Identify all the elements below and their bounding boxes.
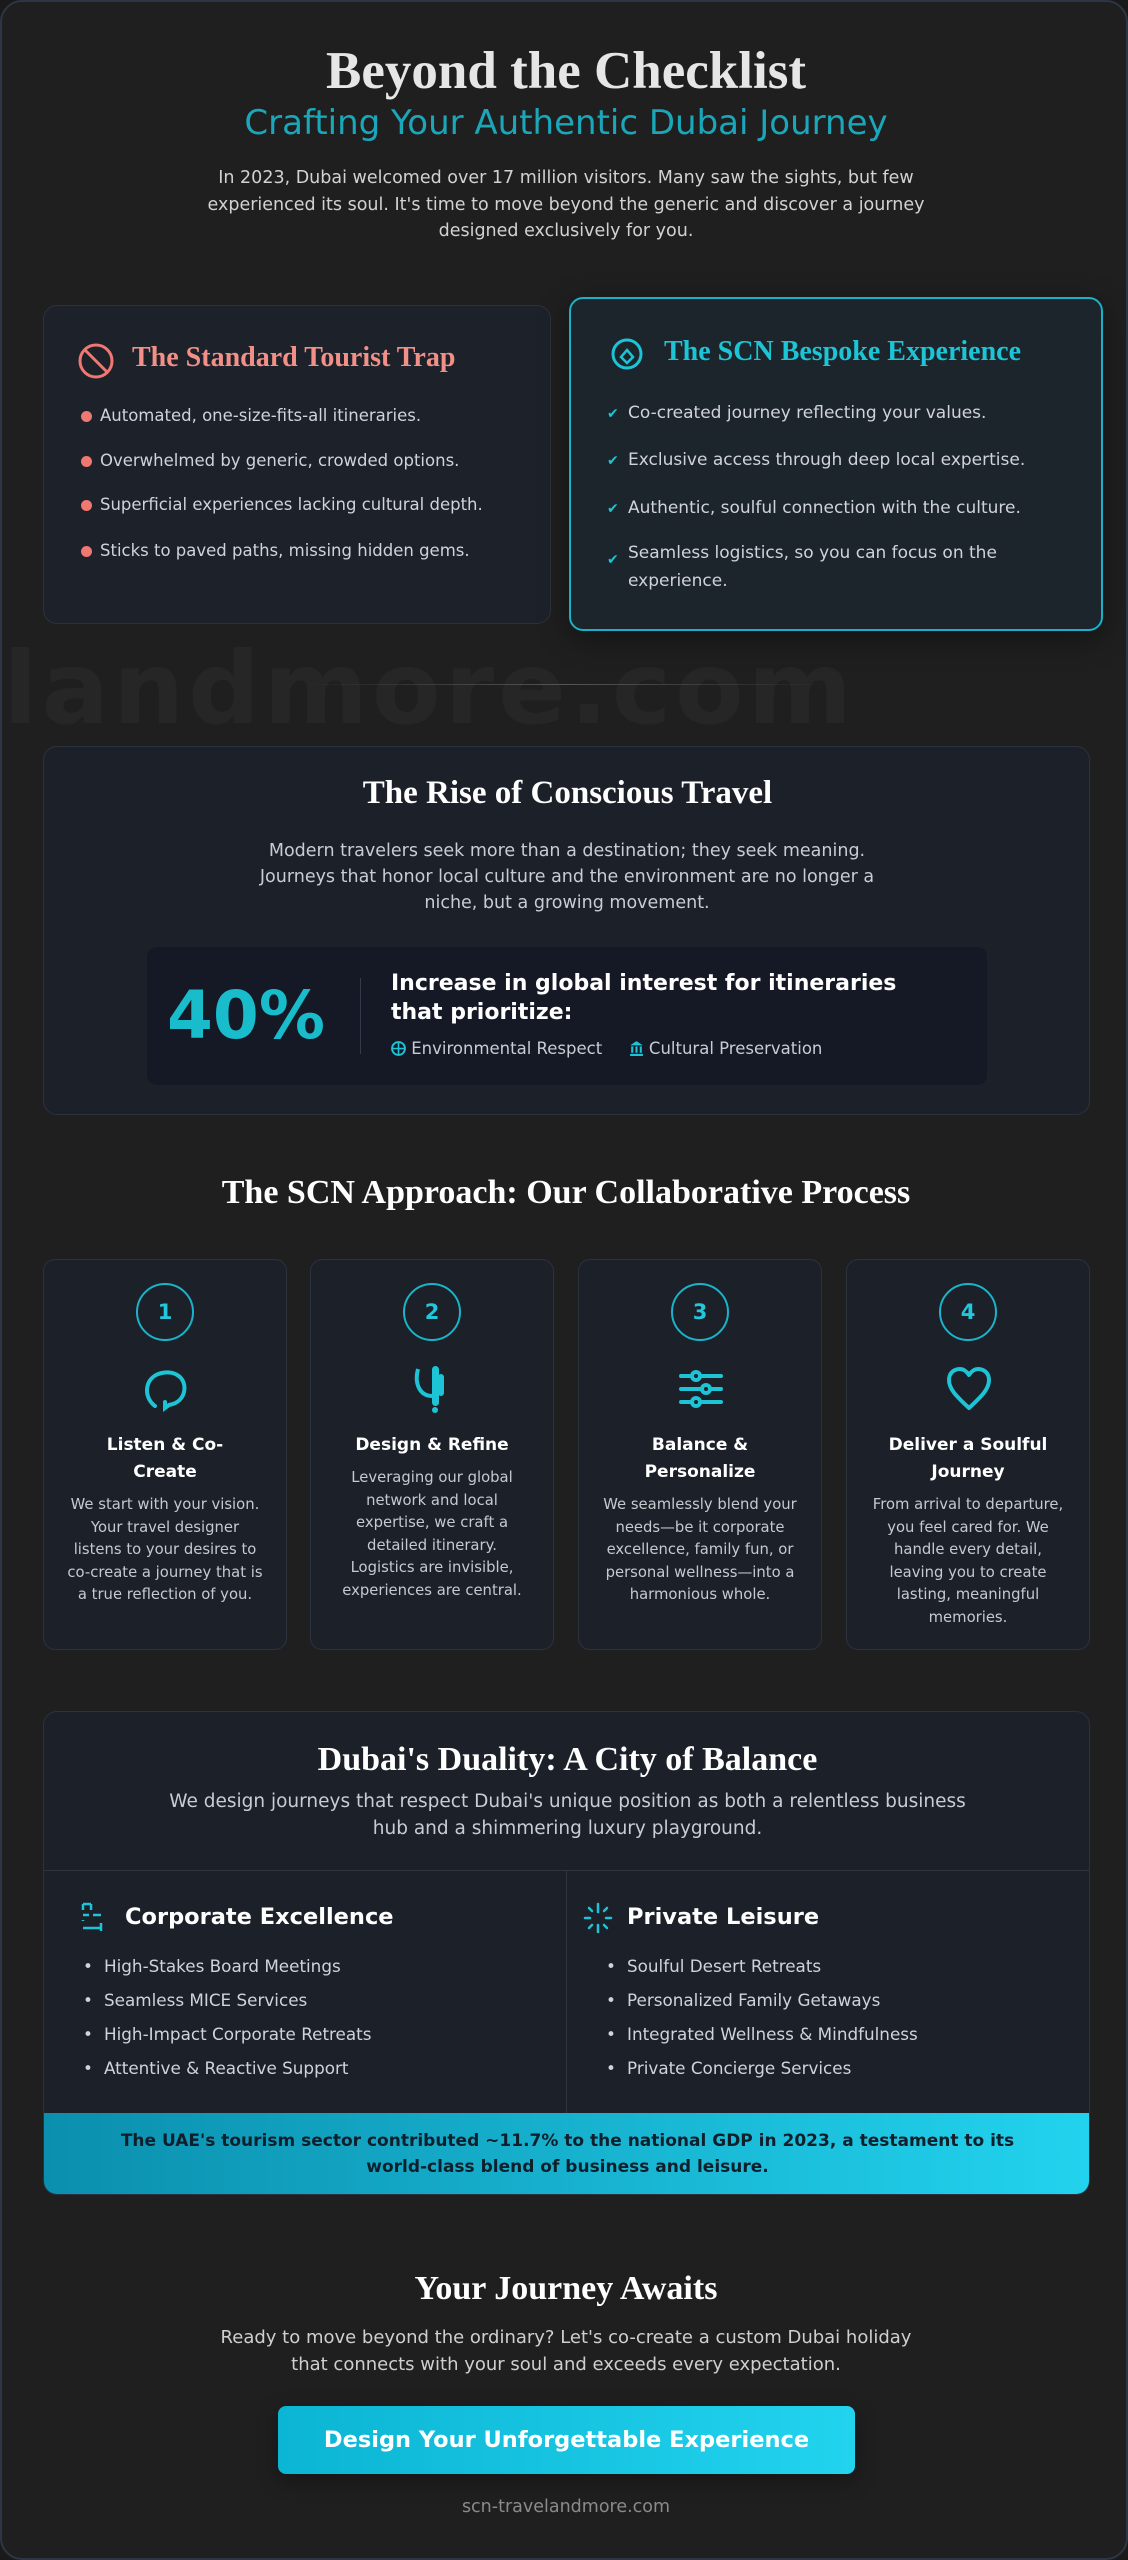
callout banner: The UAE's tourism sector contributed ~11.7% to the national GDP in 2023, a testament to its world-class blend of business and leisure. bbox=[121, 2131, 1014, 2177]
step 2 bbox=[310, 1259, 554, 1650]
list: Soulful Desert Retreats bbox=[627, 1956, 821, 1976]
step 3: We seamlessly blend your bbox=[603, 1496, 797, 1513]
panel: Dubai's duality bbox=[43, 1711, 1090, 2195]
step 4: memories. bbox=[929, 1608, 1007, 1626]
paragraph: Modern travelers seek more than a destination; they seek meaning. Journeys that honor local culture and the environment are no longer a niche, but a growing movement. bbox=[260, 841, 874, 913]
step 1: a true reflection of you. bbox=[78, 1586, 252, 1603]
heading: The Rise of Conscious Travel bbox=[363, 775, 772, 811]
list: Authentic, soulful connection with the culture. bbox=[628, 498, 1021, 518]
icon: chat bbox=[145, 1370, 186, 1412]
title: Beyond the Checklist bbox=[326, 42, 806, 100]
step 4: Deliver a Soulful bbox=[889, 1435, 1047, 1455]
subtitle: Crafting Your Authentic Dubai Journey bbox=[244, 103, 888, 143]
panel: rise of conscious travel bbox=[43, 746, 1090, 1115]
footer url: scn-travelandmore.com bbox=[462, 2497, 670, 2517]
step 3: excellence, family fun, or bbox=[607, 1541, 793, 1558]
text: scn- bbox=[276, 1819, 505, 1926]
list: experience. bbox=[628, 571, 728, 591]
step 2: Logistics are invisible, bbox=[351, 1559, 513, 1576]
callout banner bbox=[44, 2113, 1091, 2196]
step 4: From arrival to departure, bbox=[873, 1496, 1063, 1513]
list: Superficial experiences lacking cultural depth. bbox=[100, 495, 483, 514]
list: ✔ bbox=[607, 501, 619, 517]
CTA button bbox=[278, 2406, 855, 2474]
list: Attentive & Reactive Support bbox=[104, 2058, 348, 2078]
list bbox=[608, 1956, 918, 2078]
list: Private Concierge Services bbox=[627, 2058, 851, 2078]
list: Seamless logistics, so you can focus on the bbox=[628, 543, 997, 563]
column: private leisure bbox=[584, 1902, 918, 2078]
step 3: Personalize bbox=[645, 1462, 755, 1482]
heading: your journey awaits: Your Journey Awaits bbox=[415, 2270, 717, 2307]
icon: prohibited bbox=[78, 344, 114, 378]
icon: compass bbox=[612, 338, 642, 370]
tags: Environmental Respect Cultural Preservation bbox=[411, 1039, 822, 1058]
step 2: expertise, we craft a bbox=[356, 1514, 508, 1531]
stat heading bbox=[391, 971, 896, 1025]
heading: Corporate Excellence bbox=[125, 1904, 394, 1930]
step 1: Create bbox=[133, 1462, 197, 1482]
heading: approach: The SCN Approach: Our Collaborative Process bbox=[222, 1174, 910, 1211]
step 3: 3 bbox=[693, 1300, 707, 1324]
step 3: harmonious whole. bbox=[630, 1586, 770, 1603]
CTA button: Design Your Unforgettable Experience bbox=[324, 2427, 809, 2453]
step 2: experiences are central. bbox=[342, 1582, 522, 1598]
heading: Private Leisure bbox=[627, 1904, 819, 1930]
paragraph bbox=[169, 1791, 966, 1839]
heading: The Standard Tourist Trap bbox=[132, 342, 455, 373]
step 4: Journey bbox=[931, 1462, 1005, 1482]
heading: Dubai's Duality: A City of Balance bbox=[318, 1741, 817, 1778]
list bbox=[607, 403, 1025, 591]
text: travelandmore bbox=[276, 1901, 1094, 2008]
icon: briefcase bbox=[82, 1902, 102, 1931]
step 1: We start with your vision. bbox=[71, 1496, 259, 1513]
step 2: network and local bbox=[366, 1492, 498, 1508]
CTA paragraph: Ready to move beyond the ordinary? Let's co-create a custom Dubai holiday that connects with your soul and exceeds every expectation. bbox=[221, 2327, 911, 2375]
step 2: Leveraging our global bbox=[351, 1469, 513, 1486]
icon: design bbox=[414, 1366, 444, 1413]
list: Integrated Wellness & Mindfulness bbox=[627, 2024, 918, 2044]
stat number: 40% bbox=[167, 977, 325, 1054]
stat box bbox=[147, 947, 987, 1085]
icon: sparkle bbox=[584, 1902, 612, 1934]
list: ✔ bbox=[607, 552, 619, 568]
intro text: In 2023, Dubai welcomed over 17 million visitors. Many saw the sights, but few experienced its soul. It's time to move beyond the generic and discover a journey designed exclusively for you. bbox=[208, 168, 924, 241]
step 4: leaving you to create bbox=[889, 1564, 1047, 1580]
step 3: Balance & bbox=[652, 1435, 748, 1455]
list bbox=[81, 406, 483, 560]
step 4: handle every detail, bbox=[894, 1541, 1042, 1558]
step 1: co-create a journey that is bbox=[67, 1564, 263, 1580]
step 3 bbox=[578, 1259, 822, 1650]
icon: sliders bbox=[679, 1370, 723, 1408]
list: High-Stakes Board Meetings bbox=[104, 1956, 341, 1976]
list: Seamless MICE Services bbox=[104, 1990, 307, 2010]
icon: heart bbox=[947, 1367, 991, 1410]
step 1: 1 bbox=[158, 1300, 172, 1324]
step 2: detailed itinerary. bbox=[367, 1536, 497, 1554]
list bbox=[86, 1956, 372, 2078]
step 1: Listen & Co- bbox=[107, 1435, 223, 1455]
list: Exclusive access through deep local expertise. bbox=[628, 450, 1025, 470]
list: Overwhelmed by generic, crowded options. bbox=[100, 451, 459, 470]
step 4: lasting, meaningful bbox=[897, 1586, 1039, 1603]
step 3: personal wellness—into a bbox=[606, 1564, 794, 1580]
step 4: 4 bbox=[961, 1300, 975, 1324]
stat heading: Increase in global interest for itineraries bbox=[391, 971, 896, 996]
stat heading: that prioritize: bbox=[391, 1000, 572, 1025]
step 3: needs—be it corporate bbox=[615, 1518, 785, 1536]
step 1 bbox=[43, 1259, 287, 1650]
column: corporate excellence bbox=[82, 1902, 394, 2078]
panel: standard tourist trap bbox=[43, 305, 551, 624]
list: Co-created journey reflecting your values. bbox=[628, 403, 986, 423]
step 4: you feel cared for. We bbox=[887, 1518, 1049, 1536]
list: Personalized Family Getaways bbox=[627, 1990, 880, 2010]
paragraph: We design journeys that respect Dubai's unique position as both a relentless business bbox=[169, 1791, 966, 1812]
paragraph: hub and a shimmering luxury playground. bbox=[373, 1818, 762, 1839]
step 1: listens to your desires to bbox=[74, 1541, 256, 1558]
list: ✔ bbox=[607, 453, 619, 469]
step 2: 2 bbox=[425, 1300, 439, 1324]
panel: SCN bespoke experience bbox=[569, 297, 1103, 631]
list: ✔ bbox=[607, 406, 619, 422]
list: Automated, one-size-fits-all itineraries. bbox=[100, 406, 421, 425]
list: Sticks to paved paths, missing hidden gems. bbox=[100, 541, 470, 560]
list: High-Impact Corporate Retreats bbox=[104, 2024, 372, 2044]
step 4 bbox=[846, 1259, 1090, 1650]
step 1: Your travel designer bbox=[91, 1518, 239, 1536]
heading: The SCN Bespoke Experience bbox=[664, 336, 1021, 367]
step 2: Design & Refine bbox=[355, 1435, 509, 1455]
